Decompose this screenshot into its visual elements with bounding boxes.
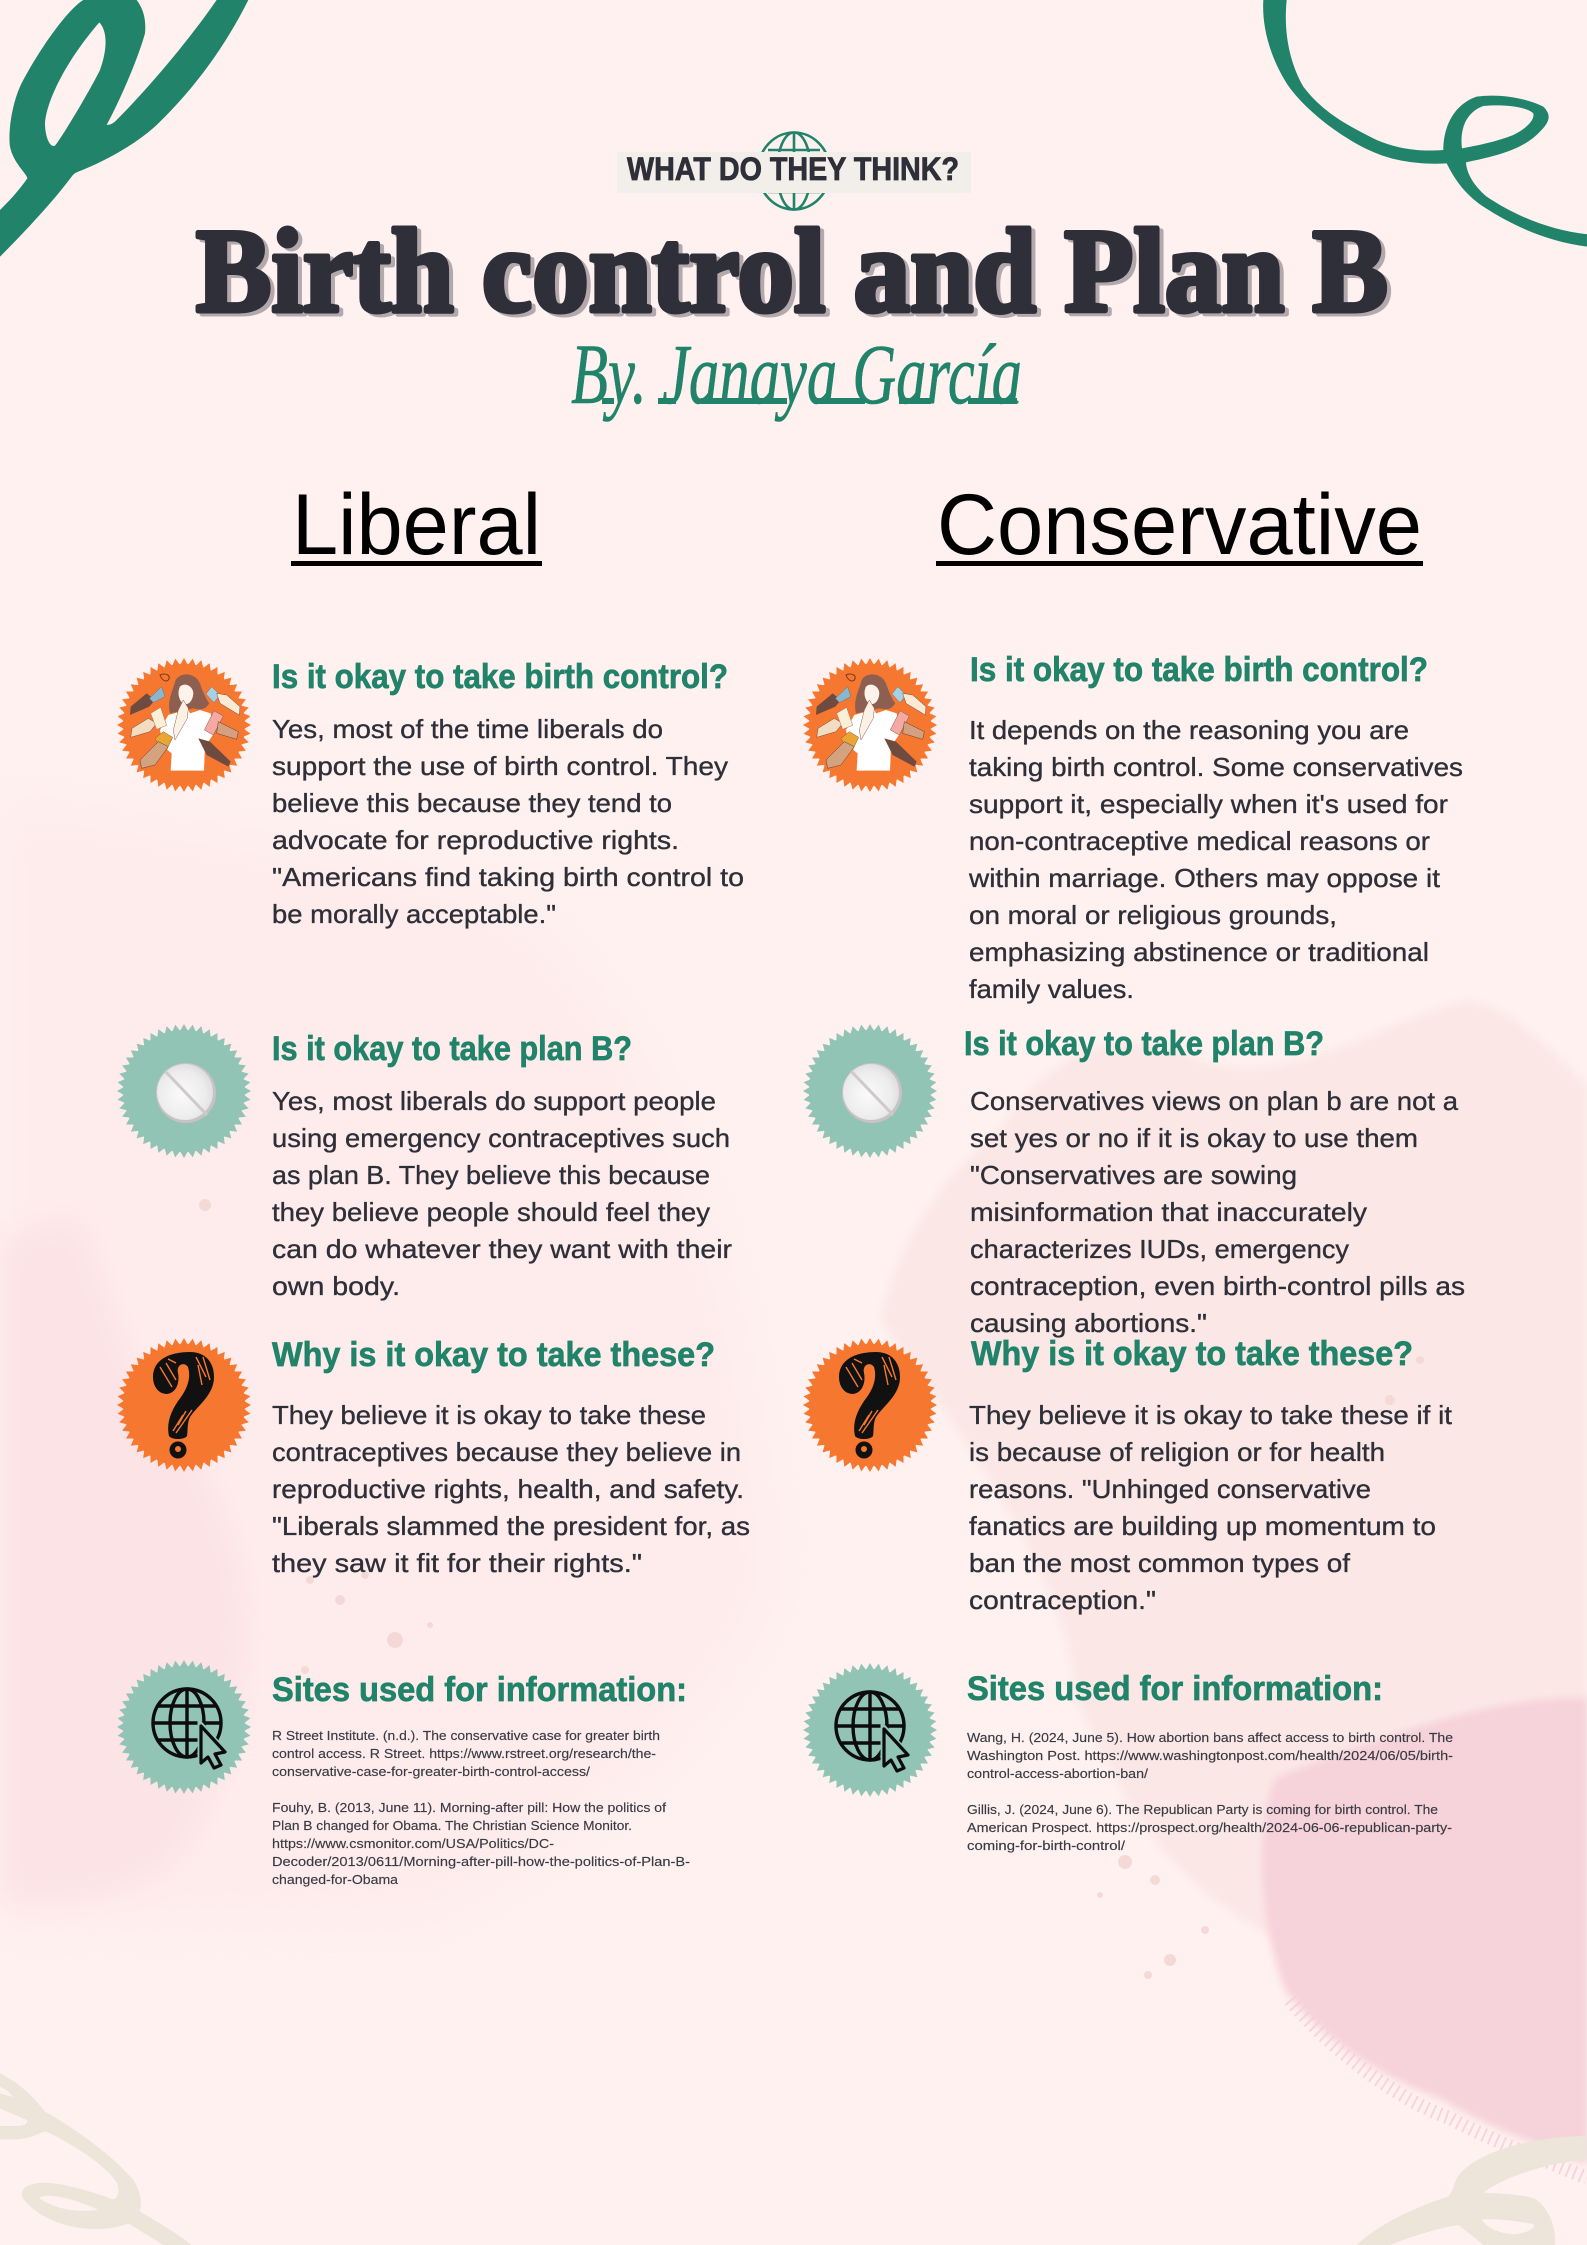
icon: question mark — [107, 1328, 261, 1482]
decoration: bottom-left beige swirl — [0, 2073, 192, 2245]
body text: emphasizing abstinence or traditional — [969, 937, 1429, 967]
splatter dots — [199, 1199, 1424, 1979]
citations: coming-for-birth-control/ — [967, 1838, 1125, 1853]
body text: is because of religion or for health — [969, 1437, 1385, 1467]
citations: conservative-case-for-greater-birth-control-access/ — [272, 1764, 590, 1779]
body text: be morally acceptable." — [272, 899, 556, 929]
subheading: Is it okay to take birth control? — [970, 651, 1428, 689]
byline underline — [602, 398, 1017, 404]
body text: "Liberals slammed the president for, as — [272, 1511, 750, 1541]
body text: own body. — [272, 1271, 400, 1301]
byline text: By. Janaya García — [571, 326, 1022, 422]
body text: contraceptives because they believe in — [272, 1437, 741, 1467]
body text — [970, 1086, 1465, 1338]
citations: R Street Institute. (n.d.). The conservative case for greater birth — [272, 1728, 660, 1743]
icon: question mark — [793, 1328, 947, 1482]
body text: family values. — [969, 974, 1134, 1004]
citations: American Prospect. https://prospect.org/health/2024-06-06-republican-party- — [967, 1820, 1452, 1835]
panel: conservative plan B — [793, 1014, 1465, 1338]
body text: as plan B. They believe this because — [272, 1160, 710, 1190]
body text: misinformation that inaccurately — [970, 1197, 1367, 1227]
body text: on moral or religious grounds, — [969, 900, 1337, 930]
citations — [967, 1730, 1453, 1853]
panel: conservative sources — [793, 1653, 1453, 1853]
body text: Conservatives views on plan b are not a — [970, 1086, 1459, 1116]
body text: reasons. "Unhinged conservative — [969, 1474, 1371, 1504]
icon: globe with cursor — [107, 1650, 261, 1804]
citations: Washington Post. https://www.washingtonpost.com/health/2024/06/05/birth- — [967, 1748, 1453, 1763]
citations: control access. R Street. https://www.rstreet.org/research/the- — [272, 1746, 656, 1761]
body text: causing abortions." — [970, 1308, 1207, 1338]
citations: Decoder/2013/0611/Morning-after-pill-how-the-politics-of-Plan-B- — [272, 1854, 690, 1869]
subheading: Is it okay to take plan B? — [964, 1025, 1324, 1063]
pink speckle edge — [1290, 2000, 1587, 2178]
citations: Wang, H. (2024, June 5). How abortion bans affect access to birth control. The — [967, 1730, 1453, 1745]
body text: using emergency contraceptives such — [272, 1123, 730, 1153]
citations: https://www.csmonitor.com/USA/Politics/DC- — [272, 1836, 554, 1851]
heading: Liberal: Liberal — [292, 477, 541, 573]
body text: Yes, most liberals do support people — [272, 1086, 716, 1116]
icon: globe with cursor — [793, 1653, 947, 1807]
badge text: WHAT DO THEY THINK? — [627, 151, 959, 187]
body text — [968, 715, 1463, 1004]
watercolor wash: left pink — [0, 1214, 247, 1905]
decoration: bottom-right beige swirl — [1357, 2136, 1587, 2245]
icon: pill — [107, 1014, 261, 1168]
icon: globe — [758, 132, 830, 210]
watercolor wash: left faint — [0, 800, 775, 1925]
body text: believe this because they tend to — [272, 788, 672, 818]
body text: advocate for reproductive rights. — [272, 825, 679, 855]
body text: characterizes IUDs, emergency — [970, 1234, 1349, 1264]
body text: within marriage. Others may oppose it — [968, 863, 1441, 893]
body text: can do whatever they want with their — [272, 1234, 732, 1264]
title: Birth control and Plan B — [196, 204, 1388, 337]
body text: they saw it fit for their rights." — [272, 1548, 642, 1578]
panel: liberal why — [107, 1328, 750, 1578]
body text: contraception, even birth-control pills as — [970, 1271, 1465, 1301]
subheading: Sites used for information: — [967, 1670, 1383, 1708]
body text: taking birth control. Some conservatives — [969, 752, 1463, 782]
subheading: Is it okay to take birth control? — [272, 658, 728, 696]
icon: woman offered contraceptives — [107, 648, 261, 802]
body text: "Conservatives are sowing — [970, 1160, 1297, 1190]
body text: "Americans find taking birth control to — [272, 862, 744, 892]
subheading: Why is it okay to take these? — [971, 1335, 1413, 1373]
panel: liberal sources — [107, 1650, 690, 1887]
body text: set yes or no if it is okay to use them — [970, 1123, 1418, 1153]
body text: fanatics are building up momentum to — [969, 1511, 1436, 1541]
citations: control-access-abortion-ban/ — [967, 1766, 1148, 1781]
citations: changed-for-Obama — [272, 1872, 399, 1887]
body text: support it, especially when it's used for — [969, 789, 1448, 819]
body text: they believe people should feel they — [272, 1197, 710, 1227]
icon: woman offered contraceptives — [793, 648, 947, 802]
watercolor wash: right strong pink — [1262, 1698, 1587, 2165]
decoration: top-left green swirl — [0, 0, 248, 257]
panel: conservative birth control — [793, 648, 1463, 1004]
body text — [272, 1400, 750, 1578]
panel: liberal birth control — [107, 648, 744, 929]
panel: liberal plan B — [107, 1014, 732, 1301]
decoration: top-right green curl — [1263, 0, 1587, 247]
header badge: what do they think — [617, 132, 971, 210]
body text: reproductive rights, health, and safety. — [272, 1474, 744, 1504]
body text — [272, 714, 744, 929]
body text: support the use of birth control. They — [272, 751, 728, 781]
citations: Fouhy, B. (2013, June 11). Morning-after pill: How the politics of — [272, 1800, 666, 1815]
body text: They believe it is okay to take these if it — [969, 1400, 1453, 1430]
subheading: Why is it okay to take these? — [272, 1336, 715, 1374]
body text: non-contraceptive medical reasons or — [969, 826, 1430, 856]
subheading: Is it okay to take plan B? — [272, 1030, 632, 1068]
heading: Conservative: Conservative — [937, 477, 1422, 573]
citations: Plan B changed for Obama. The Christian Science Monitor. — [272, 1818, 632, 1833]
body text: It depends on the reasoning you are — [969, 715, 1409, 745]
body text — [969, 1400, 1453, 1615]
body text: They believe it is okay to take these — [272, 1400, 706, 1430]
citations: Gillis, J. (2024, June 6). The Republican Party is coming for birth control. The — [967, 1802, 1438, 1817]
citations — [272, 1728, 690, 1887]
icon: pill — [793, 1014, 947, 1168]
body text — [272, 1086, 732, 1301]
watercolor wash: right light — [880, 1000, 1587, 2160]
body text: Yes, most of the time liberals do — [272, 714, 663, 744]
body text: contraception." — [969, 1585, 1156, 1615]
panel: conservative why — [793, 1328, 1453, 1615]
body text: ban the most common types of — [969, 1548, 1351, 1578]
subheading: Sites used for information: — [272, 1671, 687, 1709]
badge background — [617, 152, 971, 193]
